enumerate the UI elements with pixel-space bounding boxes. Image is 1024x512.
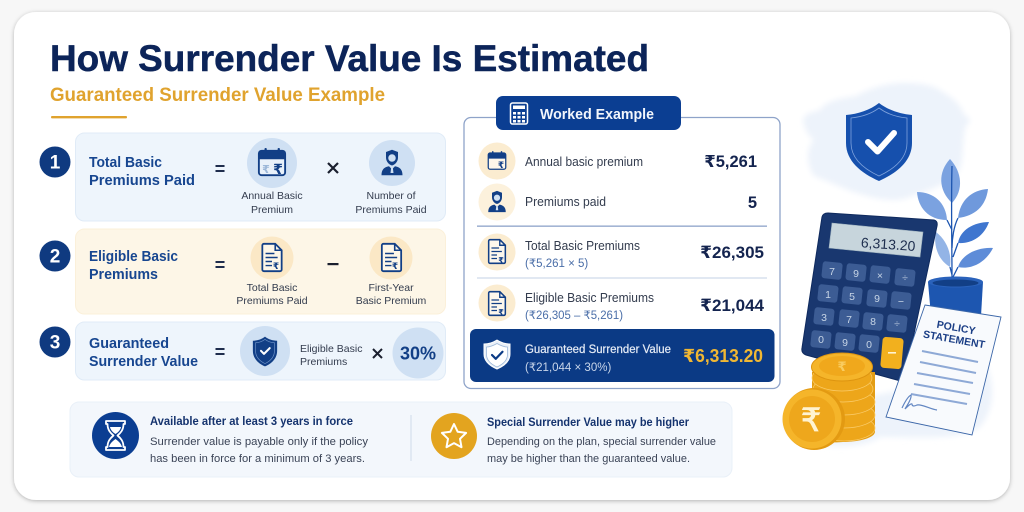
- row: eligible basic premiums: ₹21,044: [700, 296, 765, 315]
- equals sign: =: [215, 342, 225, 362]
- step 1: total basic premiums paid: [40, 133, 446, 221]
- step 1 heading: Total Basic: [89, 155, 162, 171]
- icon: document rupee: ₹: [273, 261, 279, 271]
- note: available after three years: [92, 412, 369, 465]
- calculator key labels: 9: [874, 293, 880, 305]
- step 3: guaranteed surrender value: [40, 322, 446, 380]
- multiply sign: [328, 163, 338, 173]
- row: annual basic premium: ₹: [498, 160, 504, 170]
- calculator: [802, 213, 937, 380]
- result row: guaranteed surrender value: Guaranteed Surrender Value: [525, 344, 671, 356]
- background cloud: [803, 83, 970, 200]
- label: eligible basic premiums: Premiums: [300, 356, 347, 368]
- step 3 number badge: 3: [50, 332, 60, 354]
- subtitle underline: [51, 116, 127, 118]
- step 2: eligible basic premiums: [40, 229, 446, 314]
- result row: guaranteed surrender value: [470, 329, 774, 382]
- icon: document rupee: [370, 236, 412, 280]
- calculator key labels: 7: [829, 266, 835, 278]
- calculator key labels: 7: [846, 314, 852, 326]
- step 1 number badge: [40, 146, 70, 178]
- label: annual basic premium: Premium: [251, 204, 293, 216]
- row: eligible basic premiums: ₹: [498, 308, 504, 317]
- calculator key labels: 0: [818, 334, 824, 346]
- icon: document rupee: [250, 236, 294, 280]
- calculator key labels: ÷: [902, 272, 908, 284]
- large rupee coin: [782, 388, 845, 450]
- thirty percent badge: 30%: [400, 344, 436, 364]
- calculator key labels: 3: [821, 312, 827, 324]
- note: special surrender value: Special Surrender Value may be higher: [487, 417, 689, 429]
- row: premiums paid: Premiums paid: [525, 195, 606, 209]
- note: special surrender value: Depending on the plan, special surrender value: [487, 436, 716, 448]
- step 2 heading: Eligible Basic: [89, 249, 178, 265]
- soft shadow under objects: [784, 352, 992, 446]
- row: total basic premiums: ₹26,305: [700, 243, 764, 262]
- note: available after three years: Surrender value is payable only if the policy: [150, 436, 369, 448]
- row: premiums paid: [478, 184, 757, 220]
- row: total basic premiums: Total Basic Premiums: [525, 239, 640, 253]
- calculator screen: 6,313.20: [860, 234, 916, 254]
- bottom notes panel: [70, 402, 732, 477]
- row: annual basic premium: ₹5,261: [704, 153, 757, 171]
- row: total basic premiums: [478, 234, 764, 270]
- icon: white shield: [484, 340, 510, 369]
- icon: calendar rupee: ₹: [262, 164, 270, 176]
- coin stack: ₹: [837, 359, 847, 374]
- equals sign: =: [215, 255, 225, 275]
- calculator screen: [829, 223, 923, 257]
- row: annual basic premium: [478, 142, 757, 180]
- note: available after three years: Available after at least 3 years in force: [150, 416, 353, 428]
- calculator key labels: [818, 266, 908, 351]
- coin stack: [812, 353, 875, 442]
- icon: document rupee: ₹: [392, 261, 398, 271]
- calculator key labels: 5: [849, 291, 855, 303]
- large rupee coin: ₹: [801, 402, 821, 438]
- row: eligible basic premiums: Eligible Basic Premiums: [525, 291, 654, 305]
- icon: policy holder: [369, 140, 415, 186]
- step 3 number badge: [40, 326, 70, 358]
- policy statement document: [886, 305, 1001, 435]
- row: eligible basic premiums: [478, 284, 765, 322]
- step 3 heading: Guaranteed: [89, 336, 169, 352]
- result row: guaranteed surrender value: ₹6,313.20: [683, 346, 763, 366]
- icon: star: [431, 413, 477, 459]
- note: special surrender value: may be higher than the guaranteed value.: [487, 453, 690, 465]
- step 2 heading: Premiums: [89, 267, 158, 283]
- step 2 number badge: [40, 240, 70, 272]
- orange key: [880, 337, 904, 369]
- label: number of premiums paid: Number of: [366, 190, 416, 202]
- calculator key labels: ×: [877, 270, 883, 282]
- note: available after three years: has been in force for a minimum of 3 years.: [150, 453, 365, 465]
- icon: large shield: [846, 103, 912, 181]
- minus sign: [328, 263, 338, 265]
- row: annual basic premium: Annual basic premium: [525, 155, 643, 169]
- calculator key labels: 8: [870, 316, 876, 328]
- calculator key labels: −: [898, 296, 904, 308]
- illustration: finance objects: [782, 83, 1001, 450]
- subtitle: Guaranteed Surrender Value Example: [50, 85, 385, 106]
- step 3 panel background: [76, 322, 446, 380]
- step 1 number badge: 1: [50, 152, 61, 174]
- step 1 heading: Premiums Paid: [89, 173, 195, 189]
- label: first-year basic premium: Basic Premium: [356, 295, 427, 307]
- panel frame: [464, 118, 780, 388]
- calculator keys: [810, 261, 916, 353]
- label: first-year basic premium: First-Year: [368, 282, 414, 294]
- policy statement document: STATEMENT: [922, 329, 986, 351]
- plant leaves: [917, 159, 993, 278]
- header label: Worked Example: [540, 107, 654, 123]
- equals sign: =: [215, 159, 225, 179]
- label: eligible basic premiums: Eligible Basic: [300, 343, 362, 355]
- step 2 panel background: [76, 229, 446, 314]
- step 1 panel background: [76, 133, 446, 221]
- worked example panel: [464, 96, 780, 388]
- label: number of premiums paid: Premiums Paid: [355, 204, 427, 216]
- calculator key labels: 9: [853, 268, 859, 280]
- step 2 number badge: 2: [50, 246, 60, 268]
- icon: calendar rupee: ₹: [273, 161, 283, 177]
- icon: calculator: [510, 103, 528, 124]
- row: total basic premiums: ₹: [498, 256, 504, 265]
- note: special surrender value: [431, 413, 716, 465]
- icon: calendar rupee: [247, 138, 297, 188]
- label: total basic premiums paid: Total Basic: [247, 282, 297, 294]
- multiply sign: [373, 349, 382, 358]
- calculator key labels: 1: [825, 289, 831, 301]
- label: total basic premiums paid: Premiums Paid: [236, 295, 308, 307]
- calculator key labels: ÷: [894, 318, 900, 330]
- calculator key labels: 0: [866, 339, 872, 351]
- policy statement document: POLICY: [936, 319, 976, 337]
- row: eligible basic premiums: (₹26,305 – ₹5,261): [525, 310, 623, 322]
- row: premiums paid: 5: [748, 194, 757, 212]
- title: How Surrender Value Is Estimated: [50, 38, 649, 79]
- label: annual basic premium: Annual Basic: [241, 190, 303, 202]
- calculator key labels: 9: [842, 337, 848, 349]
- thirty percent badge: [392, 328, 444, 378]
- step 3 heading: Surrender Value: [89, 354, 198, 370]
- row: total basic premiums: (₹5,261 × 5): [525, 258, 588, 270]
- icon: shield check: [240, 326, 290, 376]
- result row: guaranteed surrender value: (₹21,044 × 30%): [525, 362, 611, 374]
- plant pot: [928, 276, 983, 316]
- icon: hourglass: [92, 412, 139, 459]
- panel header tab: [496, 96, 681, 130]
- notes background: [70, 402, 732, 477]
